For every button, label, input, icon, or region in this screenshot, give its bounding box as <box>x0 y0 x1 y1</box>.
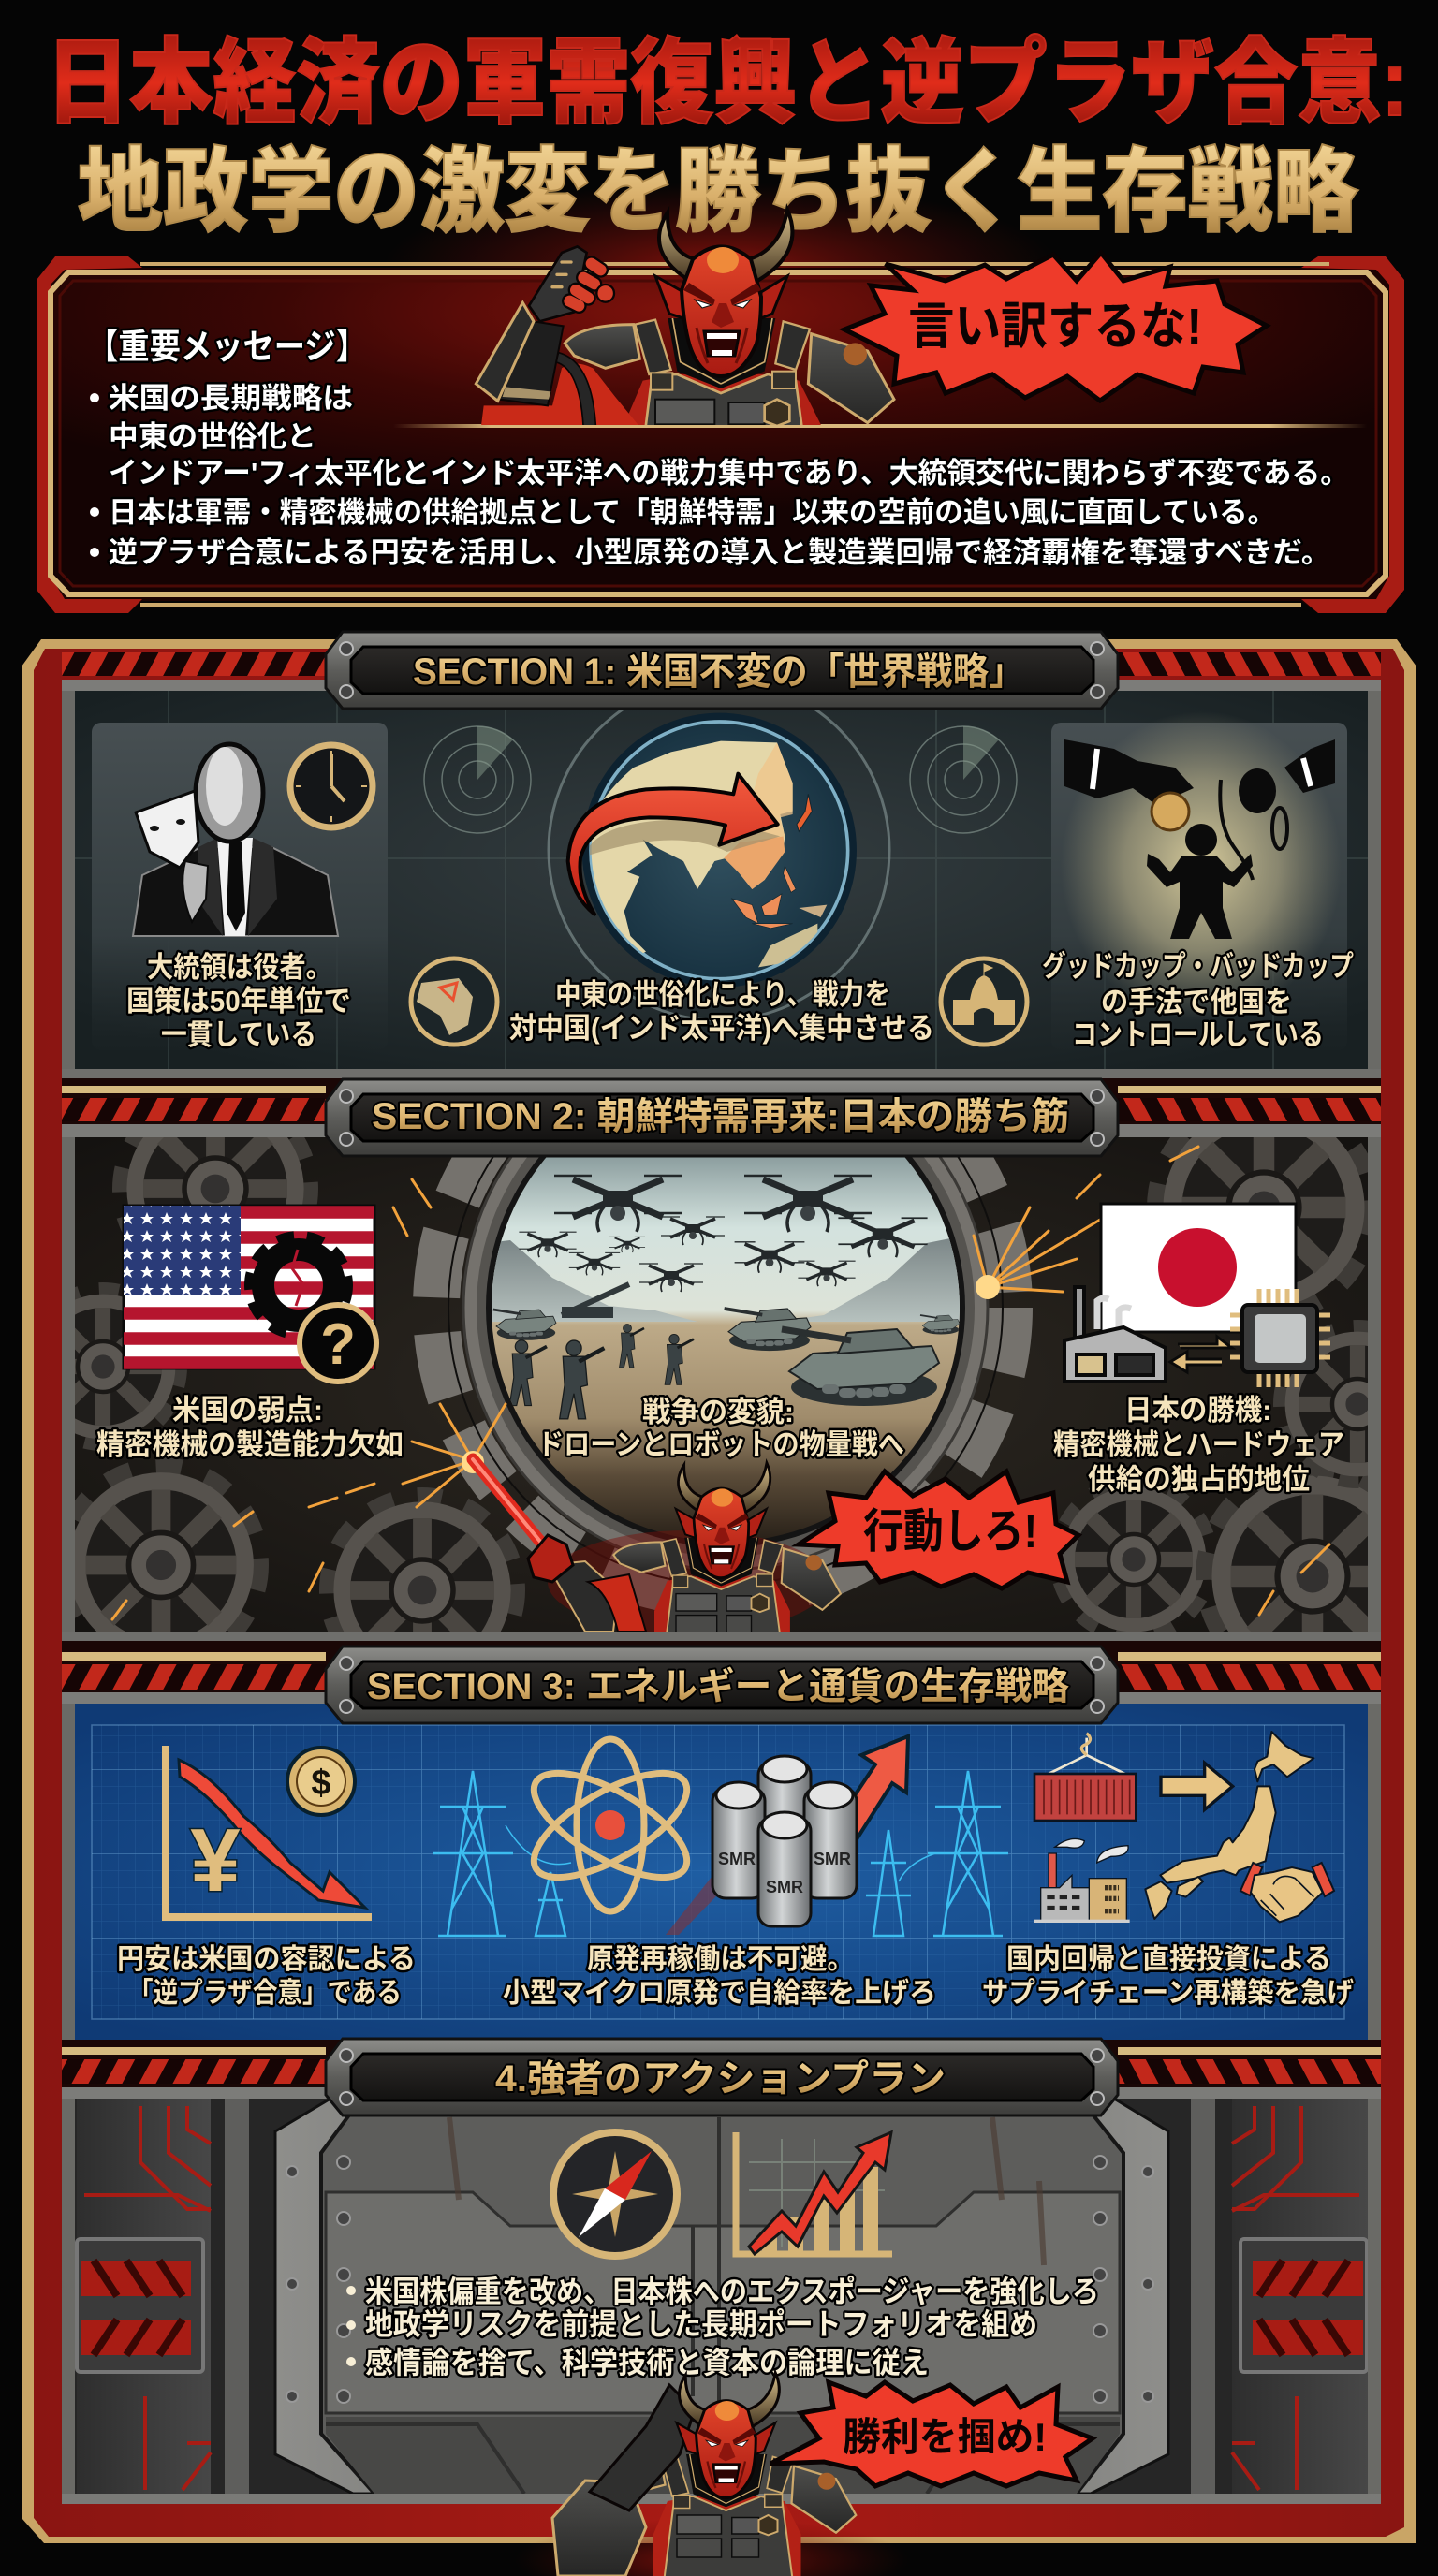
caption: middle <box>509 978 934 1045</box>
red growth arrow <box>666 1736 908 1935</box>
caption: US weakness: 米国の弱点: <box>172 1394 323 1427</box>
caption: middle: 中東の世俗化により、戦力を <box>555 978 890 1011</box>
speech burst: 勝利を掴め: 勝利を掴め! <box>843 2415 1047 2459</box>
mascot: devil with red saber <box>473 1459 841 1654</box>
caption: card 3: の手法で他国を <box>1101 986 1292 1018</box>
caption: war transformation: 戦争の変貌: <box>642 1396 794 1428</box>
speech burst: 勝利を掴め <box>770 2382 1093 2486</box>
chart: rising <box>736 2132 892 2254</box>
chart: yen decline <box>166 1746 372 1917</box>
icon: SMR cylinders <box>712 1756 857 1926</box>
text block: key message: インドアー'フィ太平化とインド太平洋への戦力集中であり、大統領交代に関わらず不変である。 <box>109 457 1349 490</box>
text block: action plan: 米国株偏重を改め、日本株へのエクスポージャーを強化しろ <box>365 2275 1099 2308</box>
main frame <box>22 639 1416 2543</box>
side panel left <box>77 2099 211 2494</box>
section dividers <box>62 652 1381 2099</box>
caption: Japan opportunity: 精密機械とハードウェア <box>1053 1428 1344 1461</box>
caption: supply chain: 国内回帰と直接投資による <box>1006 1944 1331 1975</box>
text block: action plan: 地政学リスクを前提とした長期ポートフォリオを組め <box>365 2307 1037 2341</box>
panel: section 3 <box>75 1704 1368 2042</box>
speech burst: 行動しろ: 行動しろ! <box>863 1505 1037 1558</box>
speech burst: 行動しろ <box>799 1471 1078 1588</box>
caption: card 1 <box>126 951 351 1051</box>
icon: SMR cylinders: SMR <box>718 1850 756 1868</box>
title <box>46 31 1409 351</box>
caption: war transformation <box>537 1396 904 1461</box>
card: president actor <box>92 723 388 1050</box>
caption: Japan opportunity: 供給の独占的地位 <box>1088 1463 1310 1496</box>
caption: US weakness <box>96 1394 404 1461</box>
caption: card 1: 国策は50年単位で <box>126 985 351 1017</box>
icon: yen: ¥ <box>190 1810 241 1910</box>
sparks <box>112 1147 1329 1619</box>
pylons <box>433 1771 1008 1936</box>
panel: section 1 <box>75 680 1368 1069</box>
caption: middle: 対中国(インド太平洋)へ集中させる <box>509 1012 934 1045</box>
icon: middle east map <box>411 959 497 1045</box>
caption: nuclear <box>503 1944 936 2009</box>
caption: yen: 「逆プラザ合意」である <box>128 1978 402 2009</box>
speech burst: 言い訳するな: 言い訳するな! <box>908 299 1202 355</box>
caption: Japan opportunity <box>1053 1394 1344 1496</box>
panel: section 2 <box>75 1137 1368 1632</box>
speech burst: 言い訳するな <box>844 253 1267 401</box>
caption: card 3: グッドカップ・バッドカップ <box>1042 950 1354 983</box>
panel: key message <box>37 256 1404 613</box>
caption: supply chain <box>982 1944 1354 2009</box>
icon: SMR cylinders: SMR <box>814 1850 851 1868</box>
card: good cop bad cop <box>1051 711 1347 1050</box>
panel: section 4 <box>75 2099 1368 2494</box>
text block: key message: 米国の長期戦略は <box>109 382 353 415</box>
central gear window <box>413 1157 1033 1610</box>
icon: radar right <box>910 726 1017 833</box>
caption: nuclear: 小型マイクロ原発で自給率を上げろ <box>503 1978 936 2009</box>
caption: yen: 円安は米国の容認による <box>117 1944 416 1975</box>
icon: government building <box>941 959 1027 1045</box>
text block: key message: 日本は軍需・精密機械の供給拠点として「朝鮮特需」以来の空前の追い風に直面している。 <box>109 496 1276 529</box>
icon: puppet figure <box>1147 780 1287 939</box>
caption: US weakness: 精密機械の製造能力欠如 <box>96 1428 404 1461</box>
banner: section 4: 4.強者のアクションプラン <box>495 2058 946 2100</box>
text block: key message: 逆プラザ合意による円安を活用し、小型原発の導入と製造業回帰で経済覇権を奪還すべきだ。 <box>109 536 1330 569</box>
caption: card 3: コントロールしている <box>1072 1018 1324 1051</box>
icon: Japan flag, factory and chip <box>1064 1204 1330 1387</box>
icon: SMR cylinders: SMR <box>766 1878 803 1896</box>
banner: section 4 <box>326 2039 1118 2115</box>
side panel right <box>1232 2099 1368 2494</box>
caption: Japan opportunity: 日本の勝機: <box>1124 1394 1271 1427</box>
mascot: saluting devil <box>515 2373 908 2576</box>
caption: yen <box>117 1944 416 2009</box>
icon group: reshoring, Japan map, handshake <box>1034 1732 1334 1923</box>
icon: compass <box>553 2132 677 2256</box>
text block: action plan <box>346 2275 1099 2379</box>
text block: key message <box>87 328 1349 569</box>
caption: card 1: 大統領は役者。 <box>147 951 332 984</box>
title: 地政学の激変を勝ち抜く生存戦略 <box>78 139 1358 242</box>
frame bottom bar <box>62 2494 1381 2504</box>
caption: card 3 <box>1042 950 1354 1051</box>
arrows <box>1170 1337 1232 1372</box>
text block: key message: 【重要メッセージ】 <box>87 328 367 366</box>
icon: atom <box>519 1739 702 1911</box>
caption: war transformation: ドローンとロボットの物量戦へ <box>537 1428 904 1461</box>
icon: clock <box>290 745 373 827</box>
banner: section 1: SECTION 1: 米国不変の「世界戦略」 <box>413 651 1025 693</box>
caption: nuclear: 原発再稼働は不可避。 <box>587 1944 854 1975</box>
mascot: shouting devil <box>474 203 896 425</box>
icon: dollar coin: $ <box>311 1764 331 1803</box>
caption: card 1: 一貫している <box>161 1018 316 1051</box>
icon: radar left <box>424 726 531 833</box>
icon: dollar coin <box>287 1748 355 1815</box>
icon: coin <box>1152 793 1189 830</box>
banner: section 2: SECTION 2: 朝鮮特需再来:日本の勝ち筋 <box>372 1096 1069 1137</box>
text block: action plan: 感情論を捨て、科学技術と資本の論理に従え <box>365 2346 929 2379</box>
icon: US flag with broken gear: ? <box>320 1312 356 1377</box>
globe with arrow <box>549 680 889 1020</box>
banner: section 3: SECTION 3: エネルギーと通貨の生存戦略 <box>367 1666 1069 1707</box>
devil line under mascot <box>393 424 1367 428</box>
banner: section 1 <box>326 632 1118 709</box>
banner: section 3 <box>326 1647 1118 1723</box>
battlefield scene <box>492 1157 960 1539</box>
caption: supply chain: サプライチェーン再構築を急げ <box>982 1978 1354 2009</box>
icon: factory <box>1064 1287 1166 1382</box>
text block: key message: 中東の世俗化と <box>109 420 316 453</box>
banner: section 2 <box>326 1079 1118 1156</box>
icon: chip <box>1230 1289 1330 1387</box>
steel door <box>225 2099 1215 2494</box>
icon: US flag with broken gear <box>124 1206 376 1382</box>
